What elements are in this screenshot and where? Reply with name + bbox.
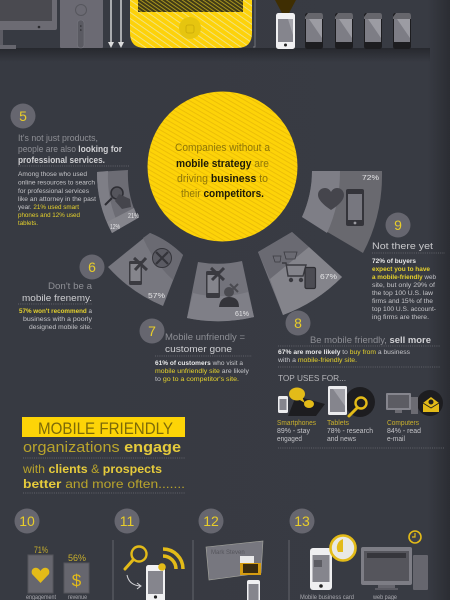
wedge 5: 21% <box>128 211 139 220</box>
icon: tower <box>413 555 428 590</box>
heading 6: mobile frenemy. <box>22 293 92 303</box>
top uses section <box>277 374 445 448</box>
heading 6 <box>22 281 92 303</box>
body 9: the top 100 U.S. law <box>372 290 433 297</box>
central yellow circle <box>148 92 298 242</box>
badge 10: 10 <box>19 513 35 529</box>
heading 9: Not there yet <box>372 241 434 251</box>
heading 5: people are also looking for <box>18 144 122 154</box>
body 8 <box>277 349 411 364</box>
icon: curved arrow <box>127 575 141 589</box>
tagline: better and more often....... <box>23 477 185 491</box>
body 9: expect you to have <box>372 266 430 273</box>
body 5: online resources to search <box>18 180 95 186</box>
computers caption: 84% - read <box>387 428 421 435</box>
circle message: mobile strategy are <box>176 158 269 170</box>
body 6: business with a poorly <box>23 316 93 323</box>
size bracket <box>253 0 255 47</box>
computers caption: Computers <box>387 420 419 427</box>
tablets caption <box>327 420 373 443</box>
heading 8: Be mobile friendly, sell more <box>310 335 431 345</box>
circle message: their competitors. <box>181 188 264 200</box>
icon: monitor showing web page <box>361 547 412 590</box>
body 5: year. 21% used smart <box>18 204 79 211</box>
computers caption <box>387 420 421 443</box>
icon: dark phone 2 <box>335 13 353 49</box>
body 5: for professional services <box>18 188 90 195</box>
icon: shopping carts and phone <box>273 252 316 288</box>
tablets caption: and news <box>327 436 356 443</box>
heading 7 <box>165 332 245 354</box>
icon: dark phone 1 <box>305 13 323 49</box>
smartphones caption: 89% - stay <box>277 428 310 435</box>
icon: smartphone with speech bubbles <box>278 388 325 416</box>
icon: desktop monitor <box>0 0 57 49</box>
body 8: with a mobile-friendly site. <box>277 357 357 364</box>
mobile friendly heading block <box>22 417 185 493</box>
brown light cone <box>275 0 296 13</box>
icon: phone showing card <box>310 548 332 590</box>
badge 7: 7 <box>148 323 156 339</box>
computers caption: e-mail <box>387 436 405 443</box>
step 12: business card with QR <box>193 508 263 600</box>
body 9 <box>372 258 436 321</box>
body 5: tablets. <box>18 220 38 227</box>
step 9: not there yet <box>302 171 445 321</box>
icon: desktop tower <box>60 0 103 48</box>
badge 6: 6 <box>88 259 96 275</box>
icon: double down arrows <box>108 0 124 48</box>
step 5: professional services <box>10 104 139 233</box>
badge 13: 13 <box>294 513 310 529</box>
icon: phone <box>346 189 364 226</box>
body 6: 57% won't recommend a <box>19 308 92 315</box>
body 5: like an attorney in the past <box>18 196 96 203</box>
subheading: organizations engage <box>23 439 181 456</box>
icon: large yellow phone <box>130 0 252 48</box>
step 6: mobile frenemy <box>18 233 183 331</box>
body 9: ing firms are there. <box>372 314 429 321</box>
icon: computer with envelope <box>386 390 443 416</box>
body 6 <box>19 308 93 331</box>
revenue card: $ <box>72 571 82 590</box>
body 9: top 100 U.S. account- <box>372 306 436 313</box>
step 11: search and connect <box>113 508 183 600</box>
icon: dark phone 4 <box>393 13 411 49</box>
engagement card: 71% <box>34 545 48 555</box>
circle message: Companies without a <box>175 142 271 154</box>
body 8: 67% are more likely to buy from a business <box>278 349 411 356</box>
icon: small clock <box>409 531 421 543</box>
circle message: driving business to <box>177 173 268 185</box>
heading 6: Don't be a <box>48 281 92 291</box>
badge 8: 8 <box>294 315 302 331</box>
top uses heading: TOP USES FOR... <box>278 374 346 383</box>
icon: large clock <box>330 536 356 560</box>
top shelf of devices <box>0 0 430 62</box>
heading 5: professional services. <box>18 155 105 165</box>
wedge 9: 72% <box>362 173 379 182</box>
badge 5: 5 <box>19 108 27 124</box>
badge 11: 11 <box>120 513 134 529</box>
revenue card <box>64 553 89 600</box>
wedge 8: 67% <box>320 272 337 281</box>
icon: phone with cross and person <box>206 268 239 307</box>
engagement card <box>26 545 56 600</box>
badge 12: 12 <box>203 513 219 529</box>
badge 8 <box>286 310 310 336</box>
body 9: site, but only 29% of <box>372 282 435 289</box>
heading 5 <box>18 133 122 165</box>
heading 7: Mobile unfriendly = <box>165 332 245 342</box>
revenue card: 56% <box>68 553 86 563</box>
body 9: a mobile-friendly web <box>372 274 436 281</box>
shelf shadow <box>0 48 430 62</box>
body 9: 72% of buyers <box>372 258 416 265</box>
icon: tablet with magnifier <box>328 386 375 417</box>
body 9: firms and 15% of the <box>372 298 433 305</box>
tagline <box>22 462 185 491</box>
icon: white phone <box>276 13 295 49</box>
icon: yellow magnifier <box>125 546 146 569</box>
body 7: 61% of customers who visit a <box>155 360 243 367</box>
tablets caption: 78% - research <box>327 428 373 435</box>
smartphones caption: engaged <box>277 436 302 443</box>
badge 6 <box>80 254 104 280</box>
heading 7: customer gone <box>165 344 232 354</box>
tablets caption: Tablets <box>327 420 349 427</box>
wedge 5: 12% <box>110 222 120 231</box>
tagline: with clients & prospects <box>22 462 162 476</box>
icon: small phone <box>247 580 260 600</box>
body 6: designed mobile site. <box>29 324 92 331</box>
icon: phone with signal <box>146 549 183 600</box>
body 5: phones and 12% used <box>18 212 80 219</box>
step 7: customer gone <box>140 261 254 383</box>
wedge 6 <box>108 233 183 306</box>
wedge 9 <box>302 171 382 253</box>
step 8: sell more <box>258 232 440 367</box>
yellow banner: MOBILE FRIENDLY <box>38 419 173 438</box>
icon: magnifier and hand <box>105 187 131 209</box>
smartphones caption <box>277 420 316 443</box>
heading 5: It's not just products, <box>18 133 98 143</box>
smartphones caption: Smartphones <box>277 420 316 427</box>
body 7: mobile unfriendly site are likely <box>155 368 250 375</box>
badge 9: 9 <box>394 217 402 233</box>
step 10: engagement and revenue <box>14 508 89 600</box>
wedge 5 <box>97 170 139 233</box>
body 5 <box>18 171 96 227</box>
icon: phone with cross and bubble <box>129 248 172 285</box>
body 5: Among those who used <box>18 171 87 178</box>
circle message <box>175 142 271 200</box>
wedge 8 <box>258 232 342 315</box>
wedge 7: 61% <box>235 309 249 318</box>
icon: heart <box>318 188 344 210</box>
body 7: to go to a competitor's site. <box>155 376 239 383</box>
badge 9 <box>386 212 410 238</box>
business card: Mark Steven <box>211 550 245 556</box>
body 7 <box>155 360 250 383</box>
step 13: business card vs web page <box>289 508 428 600</box>
wedge 6: 57% <box>148 291 165 300</box>
icon: dark phone 3 <box>364 13 382 49</box>
